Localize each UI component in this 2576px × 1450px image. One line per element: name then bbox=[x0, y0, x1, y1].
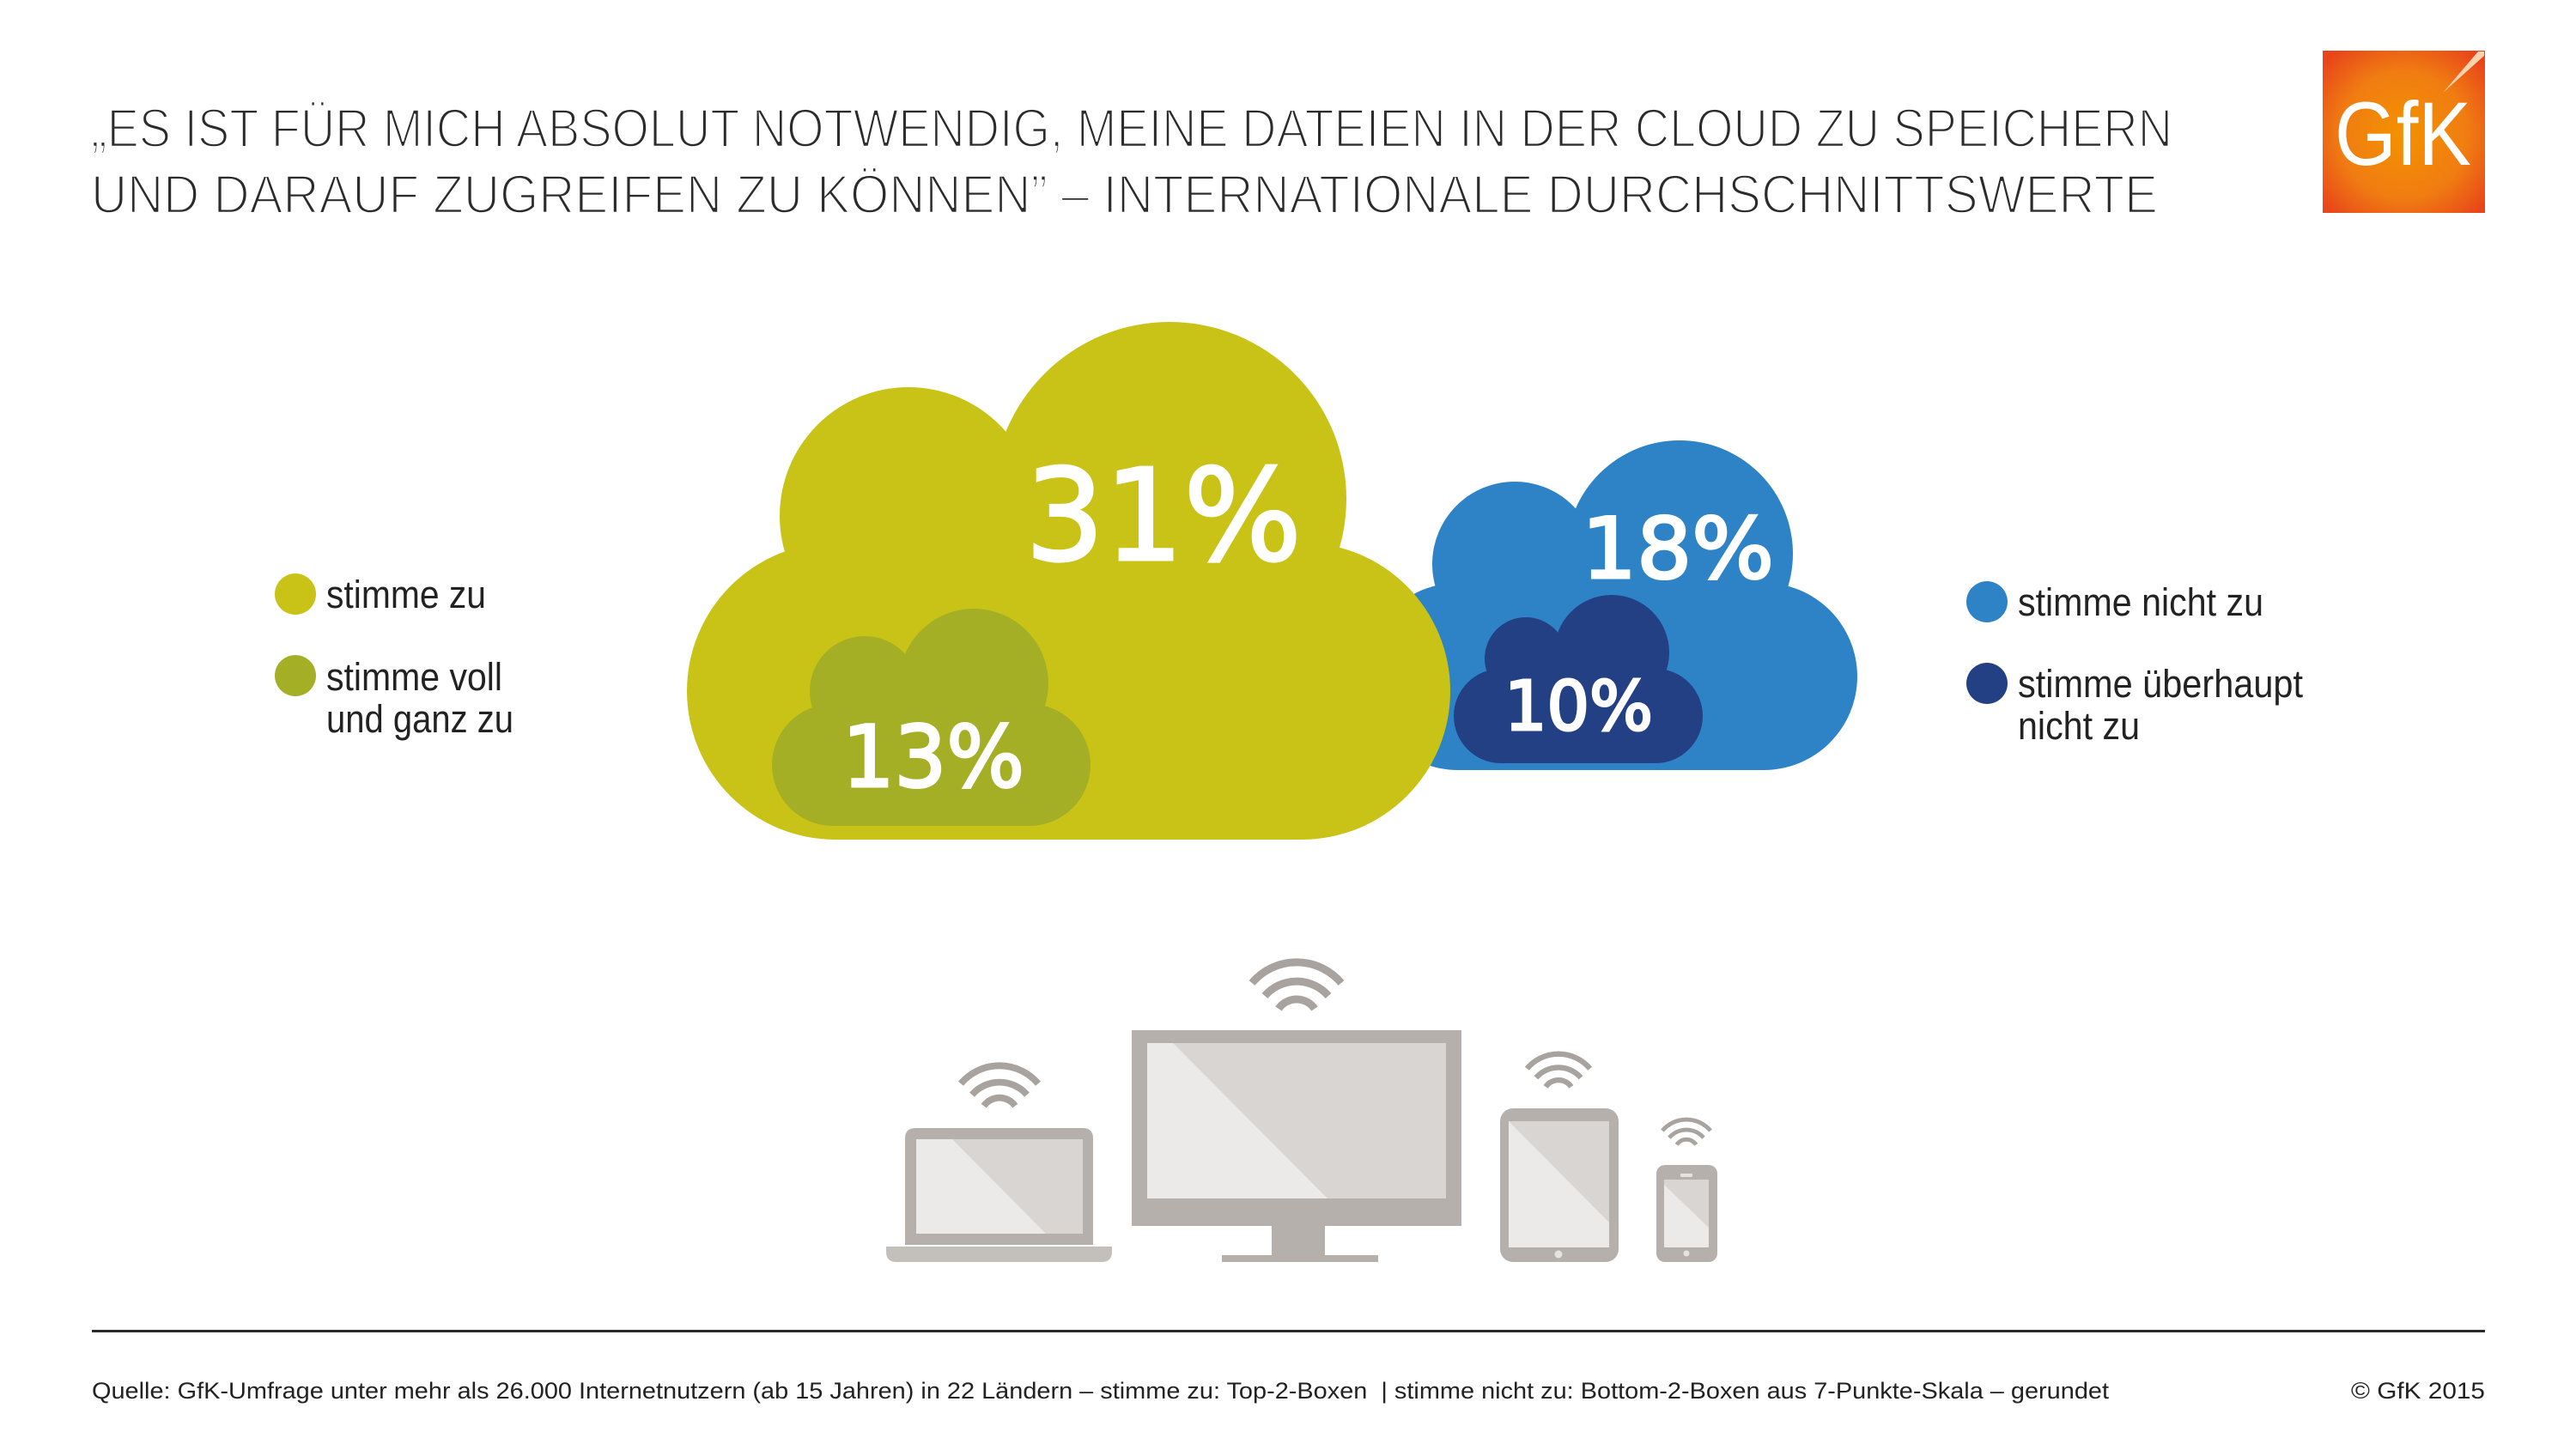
device: desktop monitor bbox=[1132, 1030, 1461, 1262]
value: 18%: 18% bbox=[1582, 501, 1774, 598]
footer copyright: © GfK 2015 bbox=[2351, 1378, 2485, 1404]
logo: GfK bbox=[2323, 51, 2485, 213]
value: 31%: 31% bbox=[1025, 442, 1302, 590]
icon: tablet wifi bbox=[1527, 1054, 1590, 1087]
legend item: stimme überhaupt nicht zu: stimme überhaupt bbox=[2018, 662, 2303, 706]
dark blue cloud: stimme überhaupt nicht zu bbox=[1454, 595, 1703, 763]
value: 10%: 10% bbox=[1504, 667, 1653, 746]
legend: agree bbox=[275, 573, 513, 741]
legend: disagree bbox=[1966, 580, 2303, 748]
icon: laptop wifi bbox=[961, 1065, 1038, 1106]
olive cloud: stimme zu bbox=[687, 322, 1450, 840]
blue cloud: stimme nicht zu bbox=[1364, 440, 1857, 770]
small olive cloud: stimme voll und ganz zu bbox=[772, 609, 1091, 826]
legend item: stimme nicht zu: stimme nicht zu bbox=[2018, 580, 2263, 624]
device: smartphone bbox=[1656, 1165, 1717, 1262]
icon: smartphone wifi bbox=[1662, 1119, 1710, 1144]
legend item: stimme überhaupt nicht zu: nicht zu bbox=[2018, 704, 2140, 748]
legend item: stimme zu: stimme zu bbox=[326, 573, 486, 616]
legend item: stimme voll und ganz zu: stimme voll bbox=[326, 655, 502, 699]
device: tablet bbox=[1500, 1108, 1619, 1262]
legend item: stimme voll und ganz zu: und ganz zu bbox=[326, 697, 513, 741]
title bbox=[91, 99, 2172, 225]
logo: GfK: GfK bbox=[2335, 84, 2471, 185]
icon: monitor wifi bbox=[1252, 962, 1341, 1009]
device: laptop bbox=[886, 1128, 1112, 1262]
footer source note: Quelle: GfK-Umfrage unter mehr als 26.000 Internetnutzern (ab 15 Jahren) in 22 Ländern – stimme zu: Top-2-Boxen | stimme nicht zu: Bottom-2-Boxen aus 7-Punkte-Skala – gerundet bbox=[92, 1378, 2110, 1404]
legend item: stimme überhaupt nicht zu bbox=[1966, 662, 2303, 748]
value: 13%: 13% bbox=[842, 708, 1024, 807]
title: „ES IST FÜR MICH ABSOLUT NOTWENDIG, MEINE DATEIEN IN DER CLOUD ZU SPEICHERN bbox=[91, 99, 2172, 159]
legend item: stimme voll und ganz zu bbox=[275, 655, 513, 741]
title: UND DARAUF ZUGREIFEN ZU KÖNNEN” – INTERNATIONALE DURCHSCHNITTSWERTE bbox=[91, 165, 2158, 225]
